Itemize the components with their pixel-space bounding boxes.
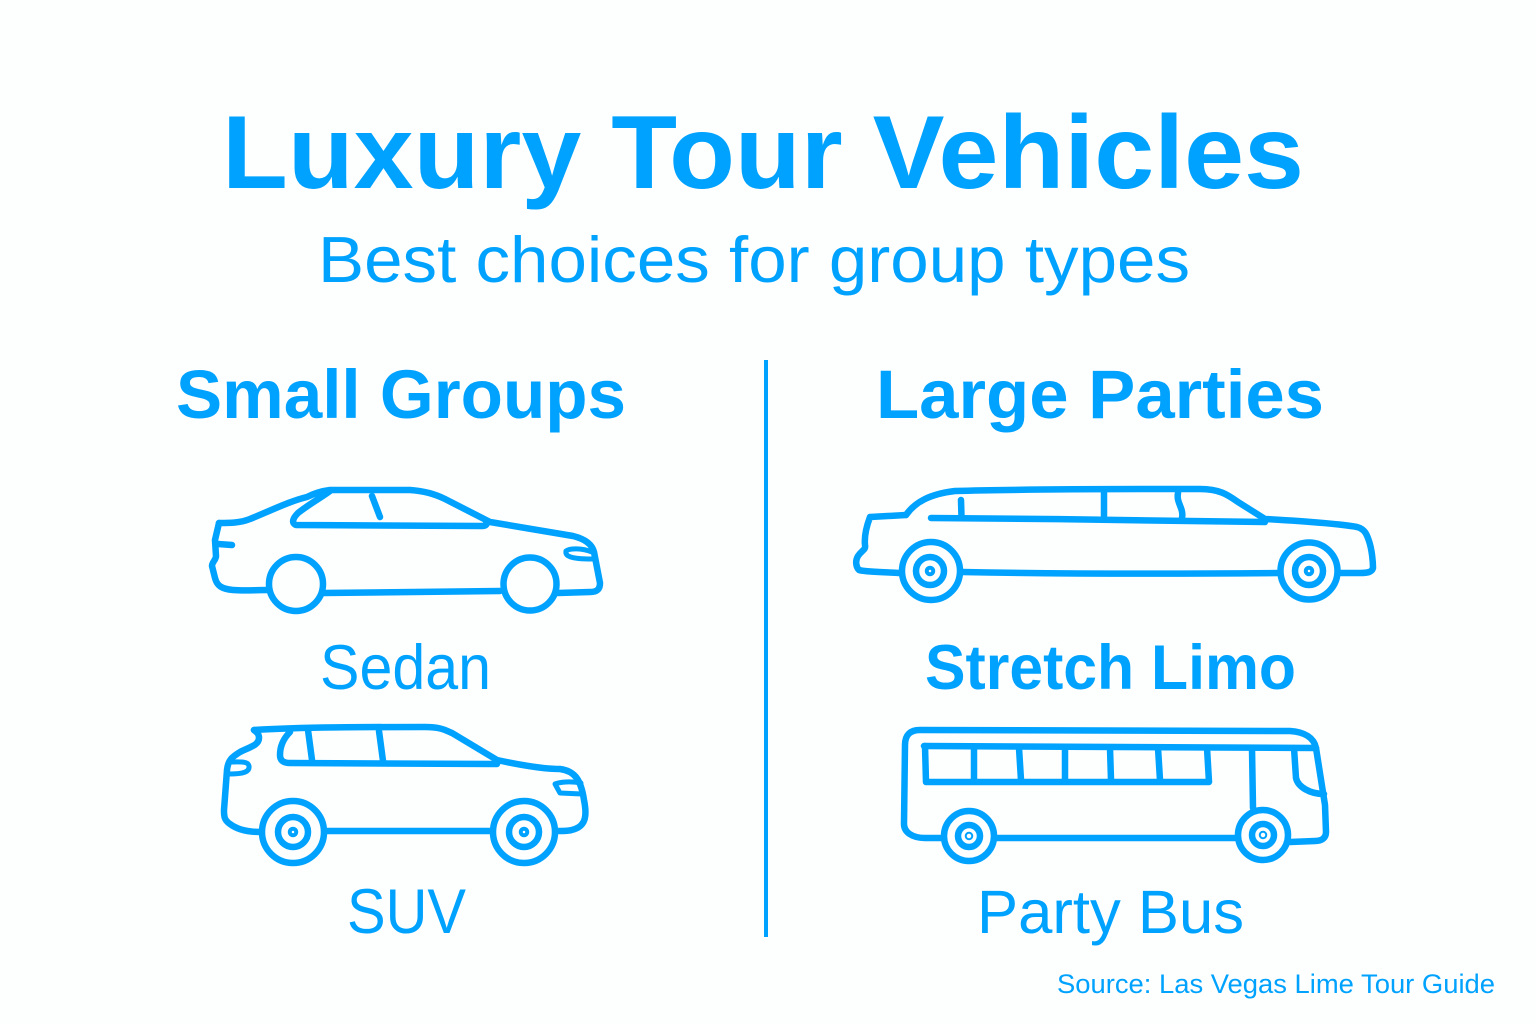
label: suv: SUV — [347, 877, 466, 947]
subtitle: Best choices for group types — [318, 223, 1190, 296]
heading: small groups: Small Groups — [176, 356, 626, 433]
source note: Source: Las Vegas Lime Tour Guide — [1057, 969, 1495, 999]
label: party bus: Party Bus — [977, 878, 1244, 946]
label: stretch limo: Stretch Limo — [925, 633, 1296, 703]
icon: party bus — [904, 730, 1326, 861]
heading: large parties: Large Parties — [876, 356, 1324, 433]
center divider — [764, 360, 768, 937]
icon: sedan — [212, 490, 600, 611]
label: sedan: Sedan — [320, 633, 491, 703]
icon: suv — [224, 727, 585, 863]
title: Luxury Tour Vehicles — [222, 95, 1304, 211]
icon: stretch limo — [856, 489, 1373, 600]
